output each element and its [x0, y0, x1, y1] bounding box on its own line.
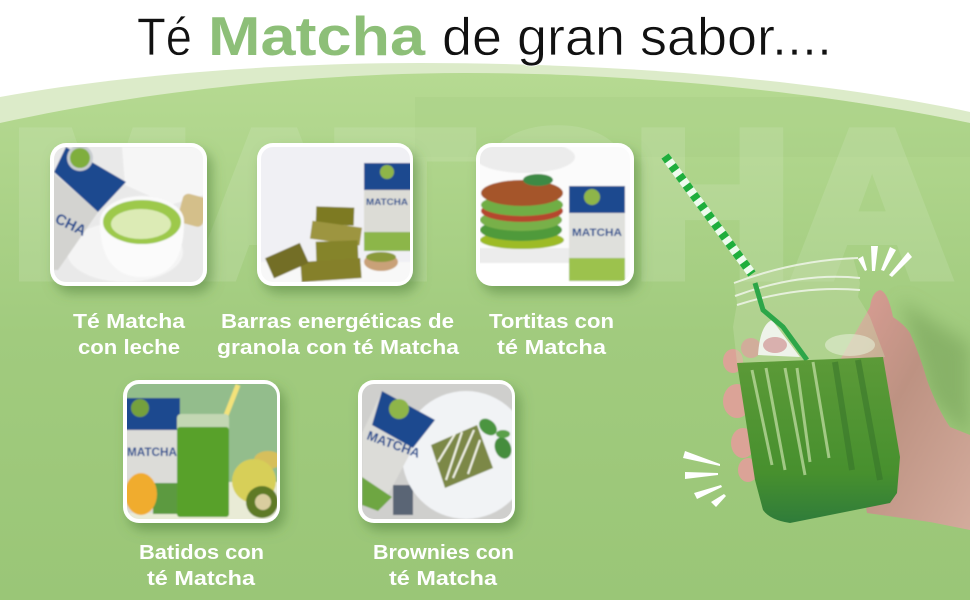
card: barras energéticas — [257, 143, 413, 286]
label: batidos: Batidos con — [139, 542, 264, 564]
card: batidos: MATCHA — [127, 445, 177, 459]
smoothie — [737, 357, 900, 523]
label: tortitas: té Matcha — [497, 337, 607, 359]
card: brownies — [358, 380, 530, 523]
label: té matcha con leche: con leche — [78, 337, 180, 359]
jar rim — [734, 258, 860, 305]
label: barras energéticas: Barras energéticas de — [221, 311, 454, 333]
title — [137, 5, 832, 67]
card: tortitas — [475, 141, 634, 286]
straw inside jar — [755, 283, 807, 360]
fingers — [723, 349, 758, 482]
label: barras energéticas: granola con té Matcha — [217, 337, 460, 359]
label: tortitas — [489, 311, 614, 359]
hand shadow — [900, 300, 970, 440]
label: brownies: Brownies con — [373, 542, 514, 564]
card: tortitas: MATCHA — [572, 227, 622, 239]
watermark word MATCHA: MATCHA — [10, 89, 952, 321]
glass ridges and dark streaks — [752, 360, 880, 480]
label: té matcha con leche — [73, 311, 186, 359]
illustration: hand holding jar of green smoothie — [665, 156, 970, 530]
icon: sparkle lines top right — [858, 246, 912, 277]
label: té matcha con leche: Té Matcha — [73, 311, 186, 333]
card: té matcha con leche — [50, 143, 209, 286]
label: batidos: té Matcha — [147, 568, 256, 590]
card: barras energéticas: MATCHA — [366, 197, 409, 207]
card: batidos — [123, 380, 282, 523]
reflections behind glass — [741, 320, 875, 358]
title: Matcha — [208, 5, 425, 67]
label: barras energéticas — [217, 311, 460, 359]
straw outside jar — [665, 156, 752, 274]
title: de gran sabor.... — [442, 8, 832, 67]
label: brownies: té Matcha — [389, 568, 498, 590]
jar glass — [733, 257, 885, 363]
title: Té — [137, 8, 192, 67]
label: brownies — [373, 542, 514, 590]
icon: sparkle lines bottom left — [683, 451, 726, 507]
card: brownies: MATCHA — [365, 428, 423, 461]
label: tortitas: Tortitas con — [489, 311, 614, 333]
hand — [840, 290, 970, 530]
card: té matcha con leche: CHA — [52, 210, 89, 240]
label: batidos — [139, 542, 264, 590]
